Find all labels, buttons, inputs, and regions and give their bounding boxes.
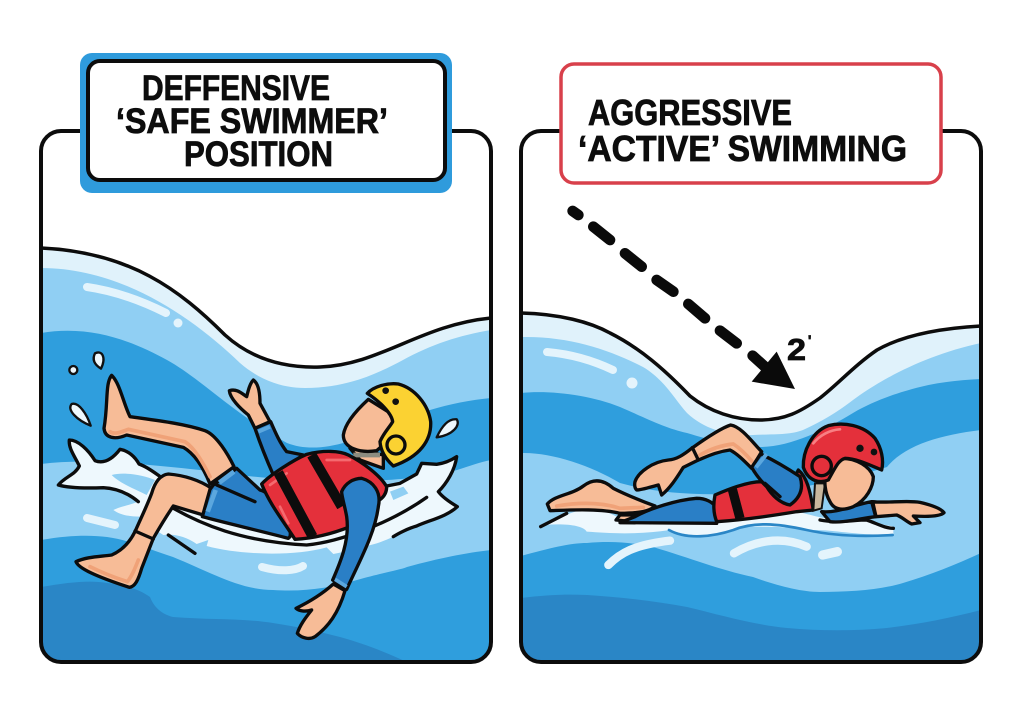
title text: aggressive: AGGRESSIVE bbox=[588, 92, 792, 133]
panel frame bbox=[521, 131, 981, 662]
title text: aggressive bbox=[578, 92, 907, 169]
panel frame bbox=[41, 131, 491, 662]
foam: white water under swimmer bbox=[541, 507, 893, 536]
leg: raised kicking leg bbox=[104, 375, 234, 484]
arm: lower arm and hand bbox=[296, 478, 379, 638]
swimmer: front crawl bbox=[541, 424, 944, 565]
title text: defensive: POSITION bbox=[184, 135, 333, 174]
title text: defensive bbox=[116, 69, 388, 174]
direction arrow: dashed diagonal bbox=[573, 211, 795, 389]
panel: defensive safe swimmer bbox=[41, 131, 491, 662]
title text: defensive: ‘SAFE SWIMMER’ bbox=[116, 102, 388, 141]
arm: extended hand bbox=[873, 501, 944, 524]
water: right panel waves bbox=[521, 313, 981, 662]
head: neck and face bbox=[813, 458, 876, 522]
arrow label: ' bbox=[808, 332, 811, 348]
title text: defensive: DEFFENSIVE bbox=[142, 69, 330, 108]
helmet: red bbox=[803, 424, 883, 481]
label: defensive title box bbox=[80, 53, 452, 193]
water highlights bbox=[608, 541, 837, 565]
torso: wetsuit bbox=[620, 498, 717, 523]
water droplets bbox=[69, 352, 458, 437]
arm: raised arm and hand bbox=[229, 380, 303, 475]
shorts bbox=[202, 468, 290, 538]
life vest: red bbox=[262, 451, 387, 539]
label: aggressive title box bbox=[561, 64, 941, 183]
arrow label: 2 bbox=[787, 332, 806, 367]
life vest: red bbox=[714, 470, 813, 522]
helmet: yellow bbox=[367, 384, 431, 466]
swimmer: floating on back with feet up bbox=[58, 352, 458, 638]
water: left panel waves bbox=[41, 248, 491, 662]
arm: recovering arm and hand bbox=[635, 425, 802, 505]
title text: aggressive: ‘ACTIVE’ SWIMMING bbox=[578, 128, 907, 169]
head: neck and face bbox=[343, 399, 394, 468]
leg: bent lower leg bbox=[76, 474, 212, 587]
legs and feet bbox=[547, 481, 655, 522]
infographic: swimming positions bbox=[39, 53, 983, 664]
panel: aggressive active swimming bbox=[521, 131, 981, 662]
splash: white water behind swimmer bbox=[58, 440, 457, 554]
